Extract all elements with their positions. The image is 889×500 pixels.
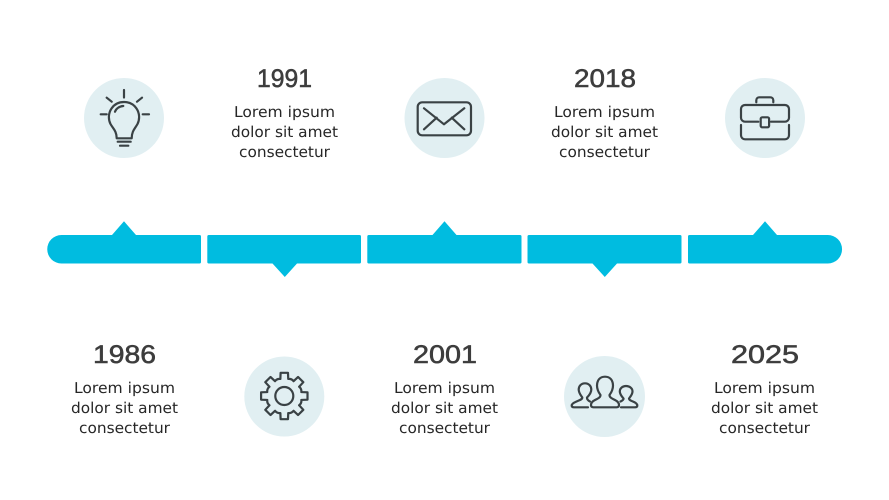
icon: light bulb (84, 78, 164, 158)
text block: 1986: Lorem ipsum (74, 379, 175, 397)
text block: 1991 (231, 65, 338, 161)
segment 4 with down pointer (528, 235, 682, 277)
text block: 2018: Lorem ipsum (554, 103, 655, 121)
icon: people group (564, 356, 645, 437)
segment 2 with down pointer (207, 235, 361, 277)
text block: 1991: dolor sit amet (231, 123, 338, 141)
icon: envelope (404, 78, 484, 158)
text block: 2025 (711, 341, 818, 437)
timeline bar (47, 221, 842, 277)
text block: 2025: consectetur (719, 419, 811, 437)
text block: 2001: Lorem ipsum (394, 379, 495, 397)
text block: 2018 (551, 65, 658, 161)
text block: 2018: 2018 (574, 65, 636, 93)
text block: 2025: Lorem ipsum (714, 379, 815, 397)
text block: 1991: Lorem ipsum (234, 103, 335, 121)
text block: 1986: dolor sit amet (71, 399, 178, 417)
text block: 1991: 1991 (257, 65, 312, 93)
text block: 1986: consectetur (79, 419, 171, 437)
text block: 2001: consectetur (399, 419, 491, 437)
text block: 1991: consectetur (239, 143, 331, 161)
text block: 2025: dolor sit amet (711, 399, 818, 417)
icon: gear (244, 356, 324, 436)
text block: 2025: 2025 (731, 341, 799, 369)
segment 5 with up pointer (688, 221, 842, 264)
text block: 2018: dolor sit amet (551, 123, 658, 141)
text block: 2001: 2001 (413, 341, 477, 369)
segment 1 with up pointer (47, 221, 201, 264)
text block: 2001 (391, 341, 498, 437)
text block: 2018: consectetur (559, 143, 651, 161)
text block: 2001: dolor sit amet (391, 399, 498, 417)
text block: 1986: 1986 (93, 341, 156, 369)
icon: briefcase (725, 78, 805, 158)
text block: 1986 (71, 341, 178, 437)
segment 3 with up pointer (367, 221, 522, 264)
